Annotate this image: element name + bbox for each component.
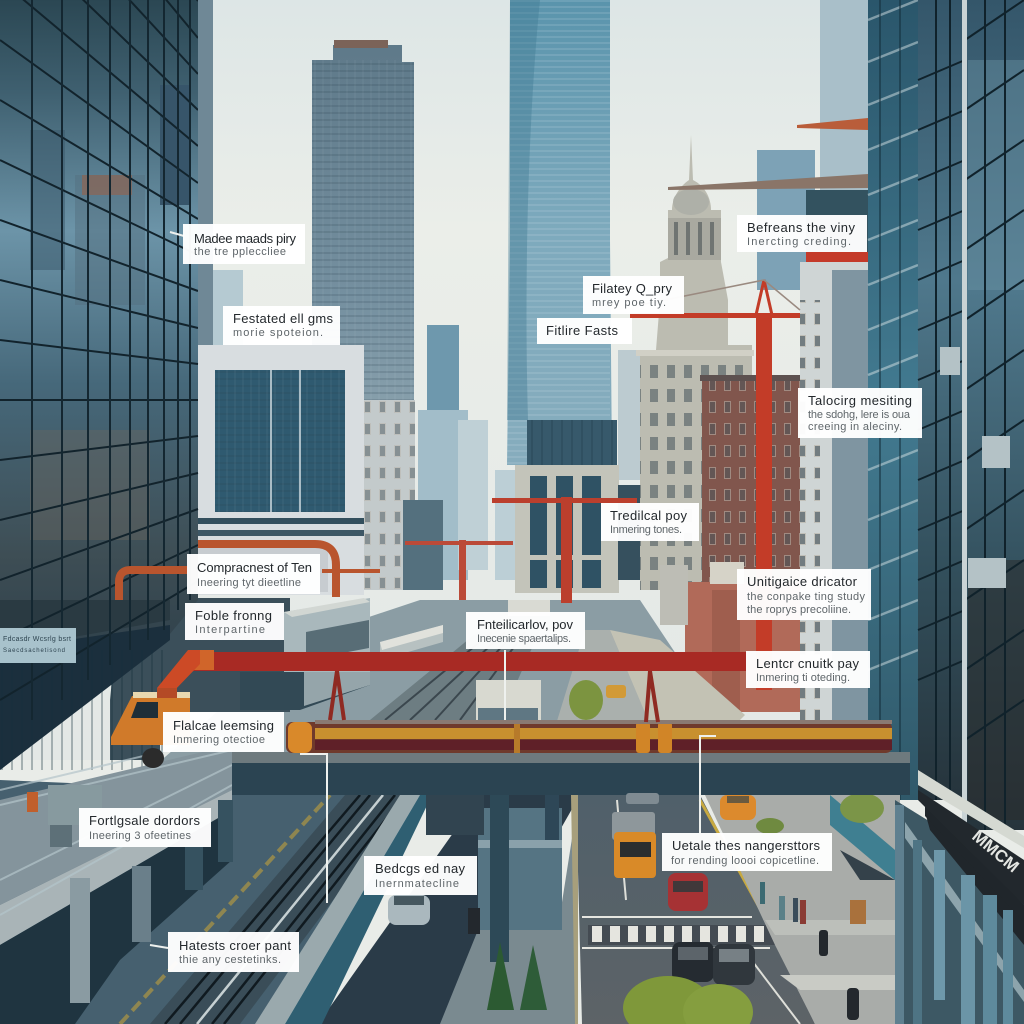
label: Uetale thes nangersttors bbox=[662, 833, 832, 871]
label: Fnteilicarlov, pov: Fnteilicarlov, pov bbox=[477, 617, 574, 632]
red car bbox=[668, 873, 708, 911]
left roadside sign: Fdcasdr Wcsrlg bsrt bbox=[3, 636, 71, 643]
label: Filatey Q_pry: mrey poe tiy. bbox=[592, 297, 666, 309]
distant skyline bbox=[213, 0, 868, 580]
white office block bbox=[198, 345, 364, 595]
label: Hatests croer pant: thie any cestetinks. bbox=[179, 954, 281, 966]
white midground tower bbox=[363, 400, 443, 590]
label: Uetale thes nangersttors: for rending loooi copicetline. bbox=[671, 855, 819, 867]
road under bridge, left lanes bbox=[318, 795, 580, 1024]
left roadside sign bbox=[0, 628, 76, 663]
label: Fortlgsale dordors bbox=[79, 808, 211, 847]
label: Tredilcal poy bbox=[601, 503, 699, 541]
beige base building with windows bbox=[515, 465, 642, 593]
label: Festated ell gms: morie spoteion. bbox=[233, 327, 323, 339]
right glass towers bbox=[918, 0, 1024, 840]
label: Fortlgsale dordors: Ineering 3 ofeetines bbox=[89, 830, 192, 842]
right white building bbox=[800, 190, 868, 722]
orange bus bbox=[612, 812, 656, 878]
far car bbox=[626, 793, 659, 804]
lower right glass mall with sign bbox=[895, 770, 1024, 1024]
articulated train bbox=[286, 720, 892, 753]
tall dark tower bbox=[312, 30, 414, 480]
left elevated walkway bbox=[0, 735, 233, 1024]
label: Bedcgs ed nay: Inernmatecline bbox=[375, 878, 459, 890]
tower cranes bbox=[405, 118, 868, 690]
label: Madee maads piry: Madee maads piry bbox=[194, 231, 296, 246]
label: Madee maads piry: the tre ppleccliee bbox=[194, 246, 286, 258]
concrete barrier and teal fence bbox=[255, 795, 432, 1024]
label: Unitigaice dricator: Unitigaice dricator bbox=[747, 574, 858, 589]
label: Flalcae leemsing bbox=[163, 712, 284, 752]
brick building bbox=[660, 375, 800, 712]
left glass tower bbox=[0, 0, 213, 770]
central glass skyscraper bbox=[507, 0, 617, 465]
label: Talocirg mesiting: Talocirg mesiting bbox=[808, 393, 912, 408]
label: Talocirg mesiting: the sdohg, lere is oua bbox=[808, 409, 911, 421]
label: Unitigaice dricator bbox=[737, 569, 871, 620]
label: Talocirg mesiting bbox=[798, 388, 922, 438]
dark car right bbox=[713, 944, 755, 985]
street and rail yard beyond the bridge bbox=[150, 600, 780, 770]
road bridge bbox=[232, 752, 910, 835]
lower right glass mall with sign: MMCM bbox=[968, 827, 1023, 876]
label: Madee maads piry bbox=[183, 224, 305, 264]
orange overhead pipes bbox=[119, 544, 380, 600]
trains in the yard bbox=[240, 598, 550, 720]
left roadside sign: Saecdsachetisond bbox=[3, 648, 65, 654]
label: Festated ell gms bbox=[223, 306, 340, 345]
domed classical tower bbox=[636, 135, 754, 590]
label: Tredilcal poy: Inmering tones. bbox=[610, 524, 682, 536]
label: Befreans the viny: Befreans the viny bbox=[747, 220, 856, 235]
rail corridor bbox=[120, 795, 412, 1024]
vehicles bbox=[388, 793, 756, 985]
ground below deck bbox=[0, 780, 420, 1024]
orange truck crane bbox=[111, 688, 190, 768]
label: Compracnest of Ten: Compracnest of Ten bbox=[197, 560, 312, 575]
orange car bbox=[720, 795, 756, 820]
label: Foble fronng: Interpartine bbox=[195, 624, 265, 636]
label: Fnteilicarlov, pov bbox=[466, 612, 585, 649]
label: Compracnest of Ten bbox=[187, 554, 320, 594]
white car bbox=[388, 895, 430, 925]
label: Bedcgs ed nay bbox=[364, 856, 477, 895]
label: Fnteilicarlov, pov: Inecenie spaertalips. bbox=[477, 633, 571, 645]
dark scaffold yard beside the tower bbox=[110, 598, 290, 760]
label: Tredilcal poy: Tredilcal poy bbox=[610, 508, 688, 523]
pointer lines bbox=[150, 232, 716, 948]
label: Foble fronng bbox=[185, 603, 284, 640]
label: Fitlire Fasts bbox=[537, 318, 632, 344]
label: Filatey Q_pry: Filatey Q_pry bbox=[592, 281, 672, 296]
label: Flalcae leemsing: Flalcae leemsing bbox=[173, 718, 274, 733]
label: Filatey Q_pry bbox=[583, 276, 684, 314]
label: Bedcgs ed nay: Bedcgs ed nay bbox=[375, 861, 466, 876]
trees and shrubs bbox=[487, 818, 784, 1024]
bridge pier bbox=[490, 790, 509, 962]
right sidewalk plaza bbox=[705, 793, 900, 1024]
label: Befreans the viny bbox=[737, 215, 867, 252]
teal balcony tower bbox=[868, 0, 918, 800]
label: Lentcr cnuitk pay: Inmering ti oteding. bbox=[756, 672, 850, 684]
label: Compracnest of Ten: Ineering tyt dieetline bbox=[197, 577, 301, 589]
street tree bbox=[569, 680, 603, 720]
dark car left bbox=[672, 942, 714, 982]
centre sidewalk and kiosk bbox=[440, 795, 578, 1024]
label: Talocirg mesiting: creeing in aleciny. bbox=[808, 421, 902, 433]
label: Hatests croer pant: Hatests croer pant bbox=[179, 938, 291, 953]
label: Unitigaice dricator: the roprys precoliine. bbox=[747, 604, 851, 616]
sky bbox=[0, 0, 1024, 760]
label: Lentcr cnuitk pay: Lentcr cnuitk pay bbox=[756, 656, 860, 671]
label: Befreans the viny: Inercting creding. bbox=[747, 236, 851, 248]
label: Fitlire Fasts: Fitlire Fasts bbox=[546, 323, 618, 338]
label: Flalcae leemsing: Inmering otectioe bbox=[173, 734, 265, 746]
label: Fortlgsale dordors: Fortlgsale dordors bbox=[89, 813, 200, 828]
label: Lentcr cnuitk pay bbox=[746, 651, 870, 688]
red gantry beam bbox=[157, 650, 746, 722]
right road with lane markings bbox=[576, 795, 815, 1024]
label: Festated ell gms: Festated ell gms bbox=[233, 311, 334, 326]
label: Uetale thes nangersttors: Uetale thes nangersttors bbox=[672, 838, 820, 853]
label: Foble fronng: Foble fronng bbox=[195, 608, 272, 623]
label: Unitigaice dricator: the conpake ting study bbox=[747, 591, 866, 603]
pedestrians bbox=[468, 882, 859, 1020]
label: Hatests croer pant bbox=[168, 932, 299, 972]
